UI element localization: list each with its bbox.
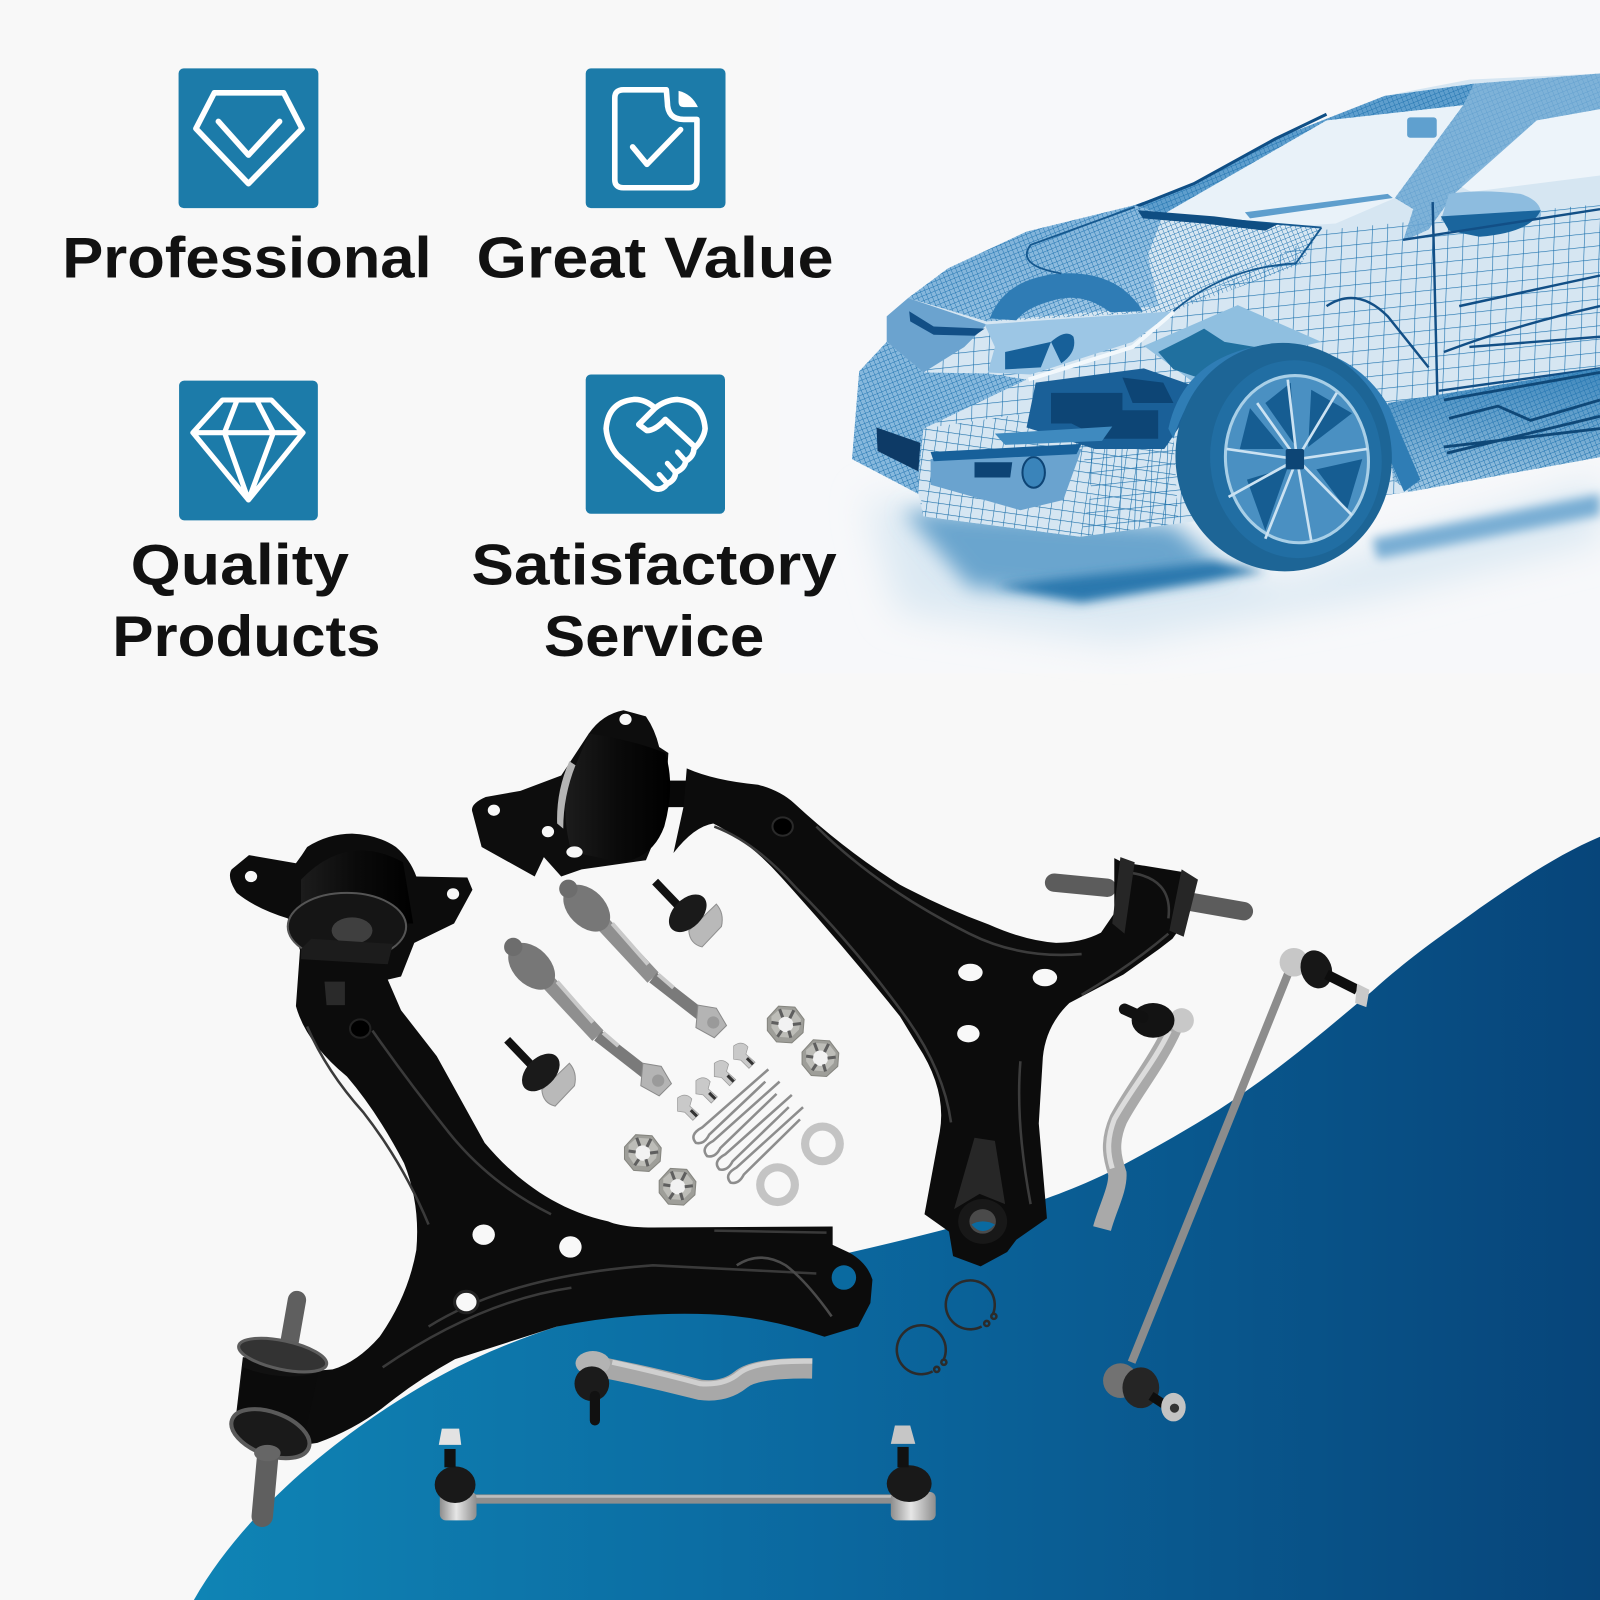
arm pins [1054, 883, 1244, 911]
icon: gem with check [179, 68, 318, 208]
wiper [1138, 210, 1278, 231]
rear view mirror [1407, 117, 1437, 138]
ball joint A [655, 882, 722, 947]
rim openings [1240, 383, 1362, 531]
cotter pins [693, 1069, 803, 1183]
mount hole right [447, 888, 459, 899]
arm collar detail [301, 939, 393, 964]
pin cap [254, 1445, 281, 1461]
hub lower washer [225, 1400, 316, 1468]
engine dark block [1027, 368, 1199, 449]
arm highlights [307, 1027, 827, 1367]
snap rings [897, 1280, 996, 1374]
front suspension bar [995, 427, 1112, 445]
blue wave background [194, 837, 1600, 1600]
arm end hole blue [971, 1221, 995, 1231]
arm end crease [737, 1258, 832, 1316]
wheel [1166, 334, 1401, 580]
hub cylinder upper [237, 1367, 318, 1429]
stabilizer link right [1103, 946, 1369, 1421]
label: Satisfactory Service: Service [544, 605, 764, 669]
arm end hole [969, 1209, 996, 1234]
feature: great value [477, 68, 834, 291]
arm end hole [832, 1265, 856, 1290]
arm pin bottom [262, 1449, 268, 1516]
outer tie rod end vertical [1102, 1003, 1194, 1229]
left control arm [225, 834, 872, 1516]
car ground shadow [867, 480, 1600, 643]
grille slot [909, 311, 985, 336]
headlight dark details [1005, 334, 1074, 369]
front grille and upper fascia [887, 298, 987, 372]
lower bumper panel [918, 413, 1092, 537]
headlight light strip [1029, 312, 1173, 380]
label: Quality Products: Products [112, 605, 381, 669]
spokes [1227, 380, 1367, 541]
car body shell [852, 73, 1600, 537]
windshield frame and roof [1135, 84, 1474, 214]
door pillars and body lines [1327, 202, 1600, 453]
label: Great Value: Great Value [477, 227, 834, 291]
arm hole 2 [559, 1236, 582, 1258]
arm slot and hole [324, 982, 345, 1005]
label: Quality Products: Quality [131, 534, 349, 598]
hub [1286, 449, 1304, 469]
arm neck hole [772, 817, 793, 836]
rim [1218, 370, 1375, 549]
feature: professional [62, 68, 432, 291]
bushing silver crescent [557, 761, 576, 829]
lower outer tie rod end [574, 1351, 812, 1420]
hood crease lines [1027, 207, 1321, 311]
bushing cylinder [565, 734, 670, 862]
mount plate [472, 710, 668, 877]
rocker and underbody [1388, 368, 1600, 492]
inner tie rod B [499, 934, 671, 1096]
ball joint B [507, 1040, 575, 1106]
wireframe car illustration [852, 73, 1600, 643]
hub cylinder [235, 1357, 318, 1449]
label: Satisfactory Service [471, 534, 837, 669]
icon: document with check [586, 68, 726, 208]
sill dark lines [1444, 372, 1600, 453]
hub top washer [236, 1332, 330, 1378]
side mirror [1441, 191, 1541, 237]
hub washers [1112, 857, 1198, 937]
roof fine mesh [1135, 73, 1600, 241]
tyre [1166, 334, 1401, 580]
hood fine mesh [908, 205, 1321, 321]
arm end hump [954, 1138, 1005, 1209]
right control arm [472, 710, 1244, 1266]
headlight [985, 311, 1173, 374]
tyre inner sidewall [1202, 353, 1390, 565]
icon: heart handshake [586, 374, 725, 514]
lock washers [756, 1122, 844, 1206]
hood [908, 205, 1163, 321]
grease nipples [678, 1043, 755, 1120]
front suspension arch under hood [990, 273, 1143, 320]
stabilizer link bottom [435, 1426, 936, 1520]
bushing axle [658, 781, 689, 807]
wheel arch [1168, 345, 1420, 492]
underbody mesh [1388, 368, 1600, 492]
engine detail [1158, 329, 1255, 380]
engine dark components [1051, 378, 1173, 439]
bushing front ring [288, 893, 406, 960]
side window [1459, 109, 1600, 192]
dark arm hole [350, 1019, 370, 1038]
arm body [230, 834, 872, 1449]
bushing cylinder [301, 850, 413, 923]
bumper upper [852, 342, 1027, 494]
castle nuts [624, 1006, 839, 1205]
a-pillar [1395, 73, 1600, 241]
arm end boss [958, 1199, 1007, 1244]
fog lamp housing [931, 444, 1082, 510]
inner tie rod A [554, 876, 727, 1038]
bumper fine mesh [852, 342, 1027, 494]
small hardware set [499, 876, 844, 1206]
arm hole 3 [455, 1291, 478, 1313]
windshield [1163, 105, 1463, 228]
arm holes [957, 964, 1057, 1042]
label: Professional: Professional [62, 227, 432, 291]
engine bay top [1144, 305, 1321, 383]
icon: diamond [179, 381, 318, 520]
lower bumper mesh [918, 413, 1179, 537]
feature: satisfactory service [471, 374, 837, 669]
arm pin top [288, 1300, 297, 1352]
mount hole left [245, 871, 257, 882]
arm highlights [714, 827, 1169, 1204]
lower grille [877, 428, 920, 471]
mount holes [488, 714, 632, 858]
background panel: car area [780, 0, 1600, 673]
roof dark outline [1135, 114, 1327, 207]
label: Quality Products [112, 534, 381, 669]
label: Satisfactory Service: Satisfactory [471, 534, 837, 598]
feature: quality products [112, 381, 381, 669]
arm hole 1 [472, 1224, 495, 1245]
arm body [673, 768, 1195, 1266]
windshield base strip [1245, 194, 1393, 218]
bushing centre [332, 917, 372, 944]
